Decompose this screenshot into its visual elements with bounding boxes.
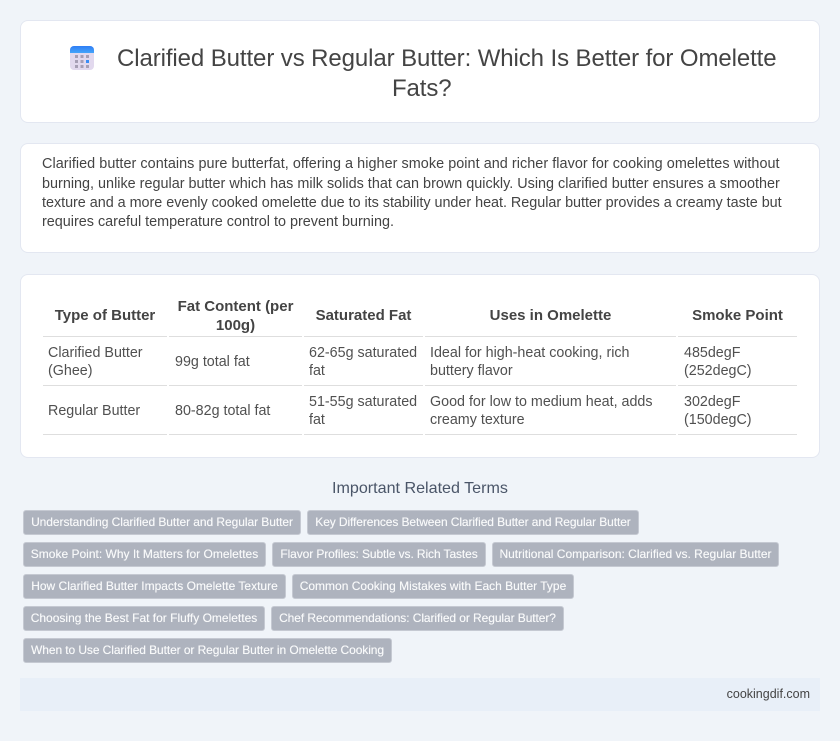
related term tags: Common Cooking Mistakes with Each Butter Type: [300, 579, 566, 593]
title: [117, 45, 776, 102]
related term tags: When to Use Clarified Butter or Regular Butter in Omelette Cooking: [31, 643, 384, 657]
table row: clarified butter: fat: [309, 363, 325, 379]
related term tags: How Clarified Butter Impacts Omelette Texture: [31, 579, 278, 593]
table header row: Uses in Omelette: [490, 307, 611, 324]
table row: clarified butter: Ideal for high-heat cooking, rich: [430, 345, 629, 361]
icon: calendar: [70, 46, 94, 70]
related term tags: Flavor Profiles: Subtle vs. Rich Tastes: [280, 547, 478, 561]
related term tags: Understanding Clarified Butter and Regular Butter: [31, 515, 293, 529]
footer bar: [20, 678, 820, 711]
table row: clarified butter: 62-65g saturated: [309, 345, 417, 361]
table row: clarified butter: Clarified Butter: [48, 345, 143, 361]
related term tags: Smoke Point: Why It Matters for Omelettes: [31, 547, 258, 561]
table row: clarified butter: [48, 345, 752, 379]
table header row: Fat Content (per 100g): [178, 298, 293, 334]
footer source text: cookingdif.com: [727, 687, 810, 701]
related term tags: [23, 510, 779, 663]
panel: header: [20, 20, 820, 123]
text block: introduction: burning, unlike regular butter which has milk solids that can brown quickly. Using clarified butter ensures a smoother: [42, 176, 780, 192]
table row: regular butter: Good for low to medium heat, adds: [430, 394, 653, 410]
table header row: Smoke Point: [692, 307, 783, 324]
table header row: Type of Butter: [55, 307, 155, 324]
table row: regular butter: (150degC): [684, 412, 752, 428]
panel: introduction: [20, 143, 820, 253]
table row: clarified butter: (Ghee): [48, 363, 92, 379]
table row: clarified butter: 99g total fat: [175, 354, 250, 370]
table row: clarified butter: buttery flavor: [430, 363, 513, 379]
text block: introduction: texture and a more evenly cooked omelette due to its stability under heat. Regular butter provides a creamy taste but: [42, 195, 782, 211]
related term tags: Nutritional Comparison: Clarified vs. Regular Butter: [499, 547, 772, 561]
table row: regular butter: [48, 394, 752, 428]
table row: clarified butter: (252degC): [684, 363, 752, 379]
table row: regular butter: creamy texture: [430, 412, 525, 428]
text block: introduction: [42, 156, 782, 230]
table row: regular butter: 302degF: [684, 394, 740, 410]
related term tags: Key Differences Between Clarified Butter and Regular Butter: [315, 515, 631, 529]
title: Clarified Butter vs Regular Butter: Which Is Better for Omelette: [117, 45, 776, 72]
table row: regular butter: 80-82g total fat: [175, 403, 270, 419]
text block: introduction: Clarified butter contains pure butterfat, offering a higher smoke point and richer flavor for cooking omelettes without: [42, 156, 780, 172]
table header row: Saturated Fat: [316, 307, 411, 324]
table row: regular butter: 51-55g saturated: [309, 394, 417, 410]
table header row: [54, 298, 783, 334]
table row: regular butter: Regular Butter: [48, 403, 140, 419]
related term tags: Chef Recommendations: Clarified or Regular Butter?: [279, 611, 556, 625]
text block: introduction: requires careful temperature control to prevent burning.: [42, 214, 394, 230]
heading: related terms: Important Related Terms: [332, 479, 508, 497]
title: Fats?: [392, 75, 452, 102]
panel: comparison table: [20, 274, 820, 458]
table: butter comparison: [43, 298, 797, 435]
related term tags: Choosing the Best Fat for Fluffy Omelettes: [31, 611, 257, 625]
table row: clarified butter: 485degF: [684, 345, 740, 361]
table row: regular butter: fat: [309, 412, 325, 428]
